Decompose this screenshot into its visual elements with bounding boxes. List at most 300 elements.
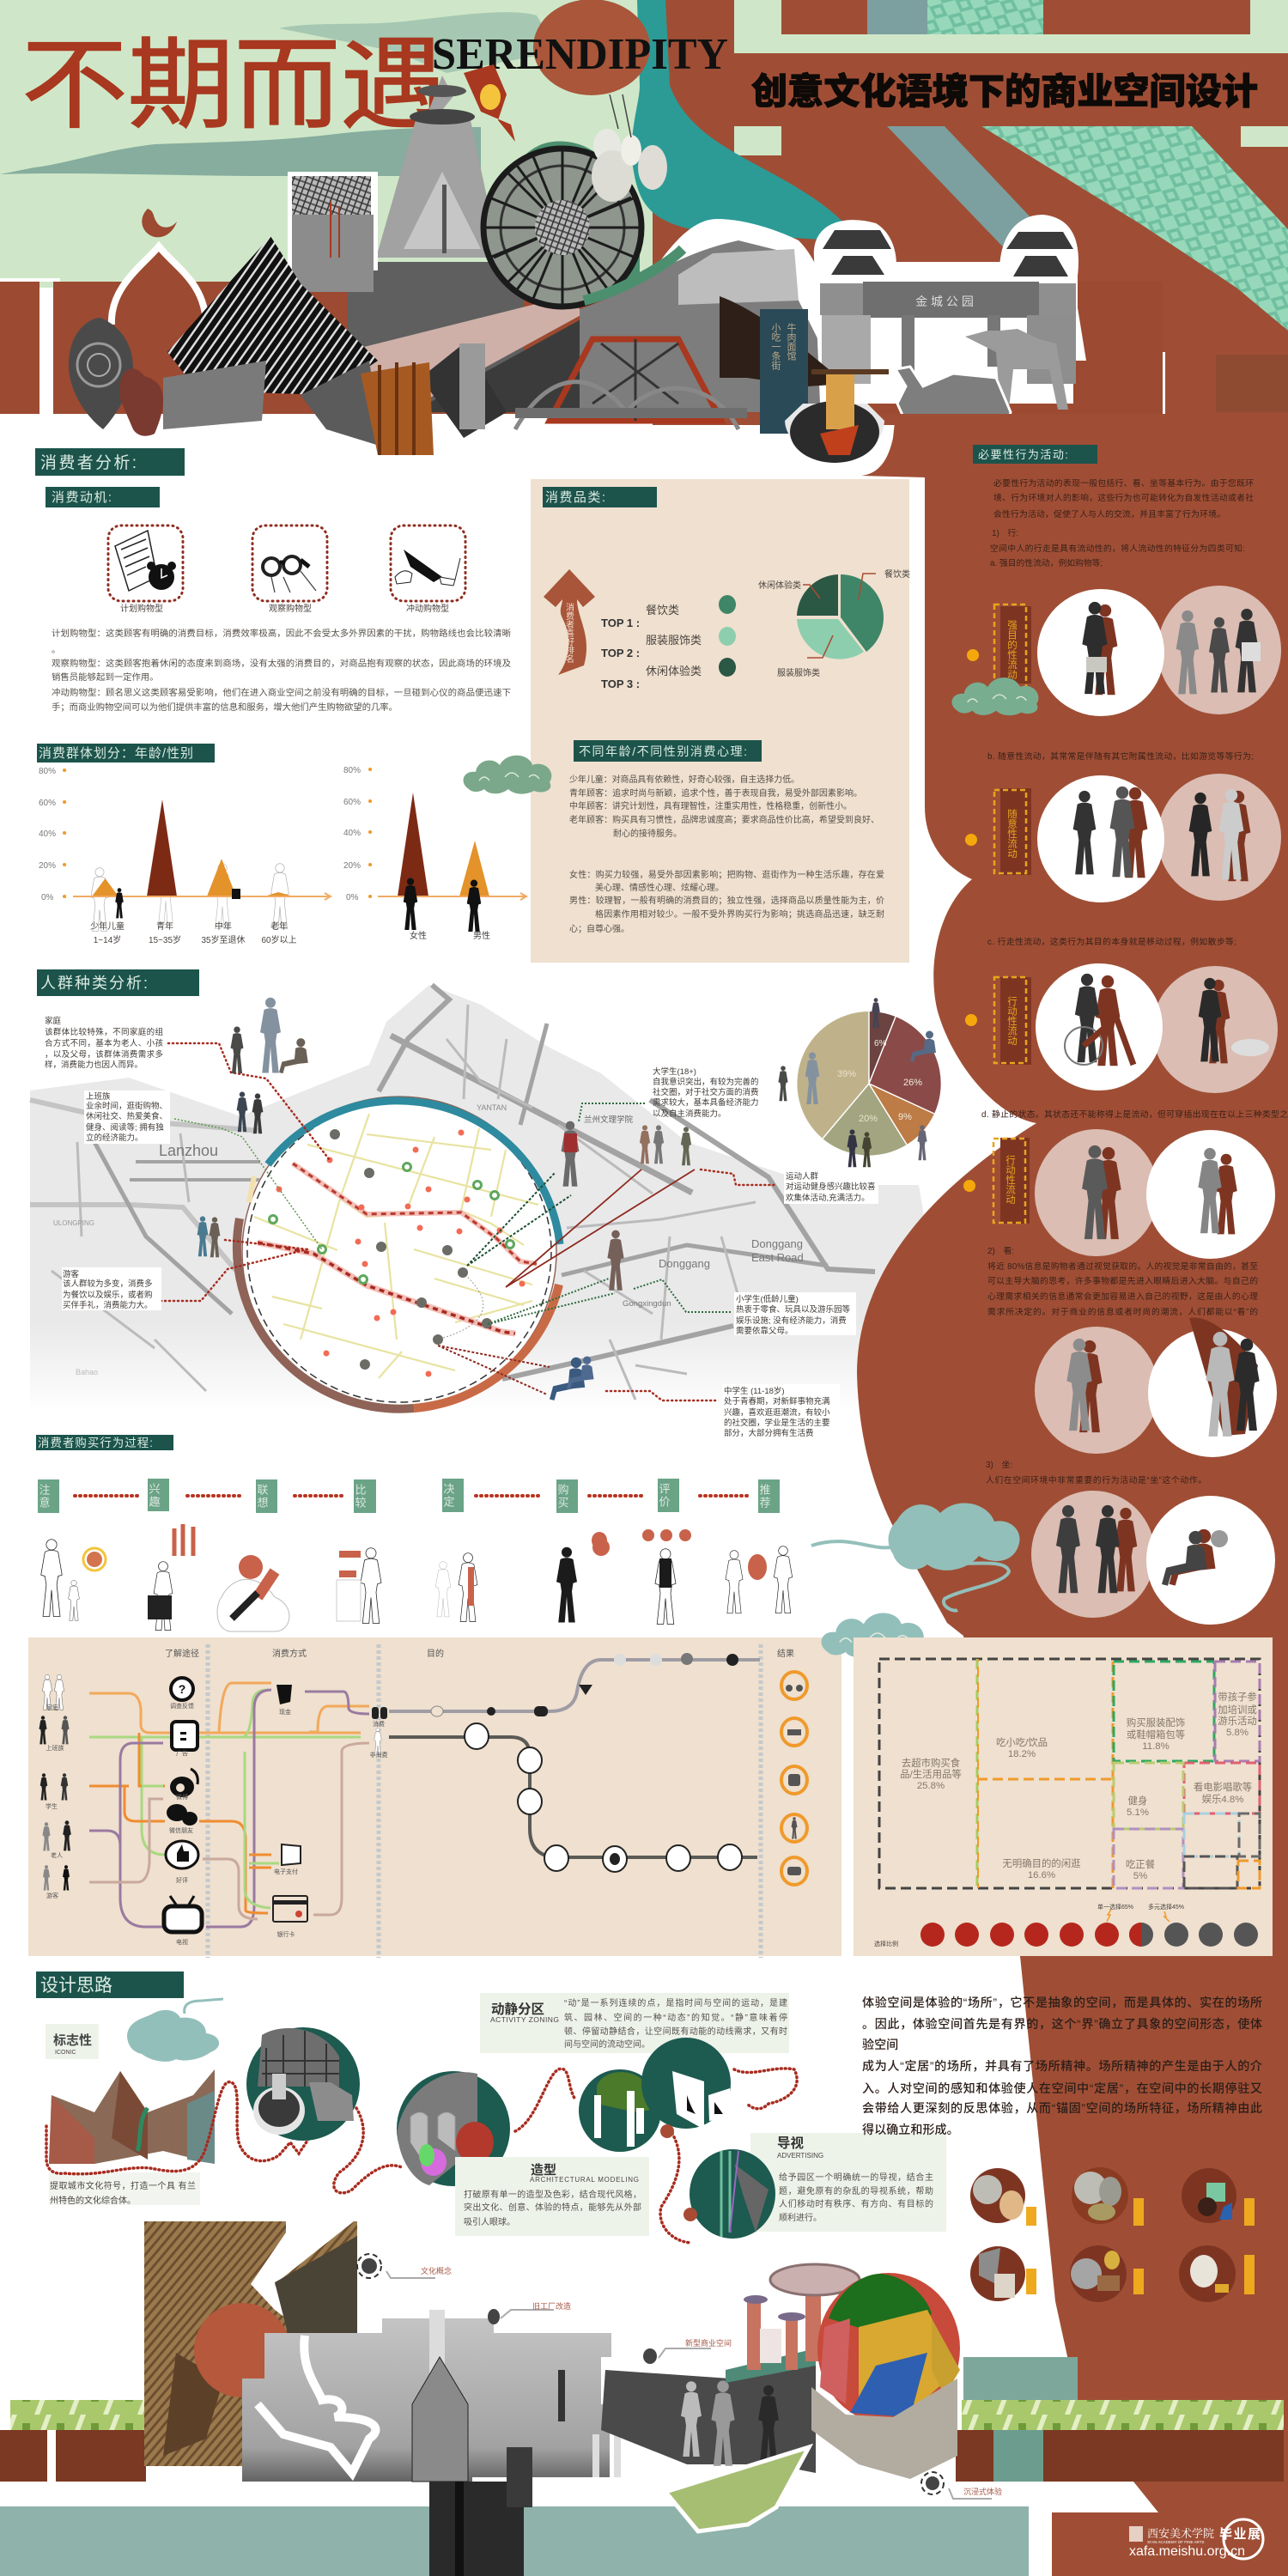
card: activity zoning: “动”是一系列连续的点，是指时间与空间的运动，是建: [564, 1997, 787, 2008]
section heading: necessary behaviour: 必要性行为活动:: [978, 448, 1068, 461]
text: sitting: [986, 1460, 1206, 1485]
bottom bands: [0, 2357, 1284, 2576]
circles: material thumbnails: [970, 2167, 1255, 2302]
chart: age split: 80%: [39, 767, 56, 776]
text: shopper types: 手；而商业购物空间可以为他们提供丰富的信息和服务，增大他们产生购物欲望的几率。: [52, 702, 398, 713]
card: iconic: ICONIC: [55, 2050, 76, 2056]
card: activity zoning: 动静分区: [491, 2002, 544, 2017]
collage: colourful sphere: [817, 2273, 960, 2424]
icon: teal cloud in design section: [127, 1999, 223, 2062]
route: red dotted path: [46, 2069, 797, 2243]
chart: category pie: [758, 568, 910, 678]
chart: gender split: 80%: [343, 766, 361, 775]
chart: age split: 1~14岁: [94, 934, 121, 945]
journey map: content: 微博: [176, 1793, 188, 1801]
callouts: collage captions: 新型商业空间: [685, 2338, 732, 2348]
treemap: labels: 加培训或: [1218, 1704, 1257, 1716]
treemap: labels: 游乐活动: [1218, 1716, 1257, 1727]
map: crowd labels: 以及自主消费能力。: [653, 1109, 726, 1119]
callouts: collage captions: 沉浸式体验: [963, 2487, 1002, 2496]
label: static state: [963, 1138, 1030, 1224]
chart: gender split: 男性: [473, 930, 490, 941]
map: city base: 兰州文理学院: [584, 1115, 634, 1125]
journey: people groups: [39, 1674, 71, 1891]
icon: teal swirling cloud: [811, 1504, 1019, 1611]
journey map: content: 微信朋友: [169, 1826, 193, 1834]
section heading: crowd types: [37, 969, 199, 996]
circle: noodle and camel: [246, 2027, 360, 2141]
text: looking: 将近 80%信息是购物者通过视觉获取的。人的视觉是非常自由的，甚至: [987, 1261, 1258, 1272]
process: step tags: 比较: [354, 1484, 366, 1508]
process: step tags: 联想: [256, 1484, 268, 1508]
chart: category pie: 休闲体验类: [758, 580, 801, 591]
collage: memorial gate: [814, 215, 1086, 404]
journey map: content: 目的: [427, 1648, 444, 1659]
row: walking flow: [965, 963, 1278, 1093]
collage: pagoda tower: [376, 76, 500, 258]
text: shopper types: 计划购物型：这类顾客有明确的消费目标，消费效率极高，因此不会受太多外界因素的干扰，购物路线也会比较清晰: [52, 628, 511, 639]
text: psychology by age and gender: 女性：购买力较强，易受外部因素影响；把购物、逛街作为一种生活乐趣，存在爱: [569, 869, 884, 880]
map: crowd labels: 自我意识突出，有较为完善的: [653, 1077, 759, 1087]
journey map: content: 电子支付: [274, 1868, 298, 1875]
map: crowd labels: 兴趣，喜欢逛逛潮流，有较小: [724, 1407, 830, 1418]
treemap: labels: 11.8%: [1142, 1741, 1170, 1752]
collage: lime ticket: [665, 2447, 809, 2531]
text: looking: 2) 看:: [987, 1245, 1014, 1256]
collage: brown accent behind pagoda: [464, 64, 515, 142]
photo: grey industrial skyline: [242, 2310, 621, 2576]
process: dotted connectors: [75, 1494, 751, 1498]
collage: dark carved panel: [720, 296, 846, 386]
collage: blue sign: 牛肉面馆: [786, 322, 797, 361]
card: advertising: [750, 2133, 946, 2232]
chart: age split: 60岁以上: [261, 934, 297, 945]
card: architectural modeling: [455, 2157, 649, 2236]
treemap: labels: 品/生活用品等: [900, 1768, 962, 1780]
chart: age split: 中年: [215, 920, 232, 932]
ranking list: 服装服饰类: [646, 634, 702, 647]
journey: channel icons: [164, 1678, 307, 1932]
journey map: content: 结果: [777, 1648, 794, 1659]
map: crowd labels: ，以及父母，该群体消费需求多: [45, 1049, 163, 1060]
chart: age split: 60%: [39, 799, 56, 808]
logo: academy mark: 毕业展: [1219, 2527, 1261, 2542]
map: crowd labels: 游客: [63, 1269, 80, 1279]
chart: crowd share pie: 26%: [903, 1078, 922, 1088]
collage: field and road: [343, 262, 592, 421]
chart: age split: 少年儿童: [90, 920, 125, 932]
text: shopper types: 销售员能够起到一定作用。: [52, 671, 159, 683]
photo: woven wooden hall: [144, 2221, 357, 2466]
chart: crowd share pie: 39%: [837, 1069, 856, 1079]
journey map: content: 了解途径: [165, 1648, 199, 1659]
text: behaviour intro: a. 强目的性流动，例如购物等;: [990, 557, 1103, 568]
section heading: age and gender: 消费群体划分：年龄/性别: [39, 746, 193, 761]
map: crowd labels: 中学生 (11-18岁): [724, 1386, 785, 1396]
collage: black lattice roof: [167, 236, 378, 395]
title: 不期而遇: 不期而遇: [21, 29, 447, 141]
circle: two people looking up: [1148, 1317, 1277, 1457]
label: purposeful flow: [967, 605, 1031, 687]
photo: market crowd: [601, 2348, 816, 2473]
text: psychology by age and gender: 老年顾客：购买具有习惯性，品牌忠诚度高；要求商品性价比高，希望受到良好、: [569, 814, 879, 825]
panel: treemap: [854, 1637, 1273, 1956]
text: psychology by age and gender: 青年顾客：追求时尚与新颖，追求个性，善于表现自我，易受外部因素影响。: [569, 787, 862, 799]
process: step tags: [38, 1479, 780, 1513]
text: psychology by age and gender: 格因素作用相对较少。一般不受外界购买行为影响；挑选商品迅速，缺乏耐: [595, 908, 884, 920]
treemap: labels: 带孩子参: [1218, 1691, 1257, 1703]
treemap: labels: 去超市购买食: [902, 1757, 961, 1769]
map: leader lines: [161, 1043, 775, 1400]
section heading: purchase process: [36, 1435, 173, 1450]
map: crowd labels: 该群体比较特殊，不同家庭的组: [45, 1027, 163, 1037]
chart: age split: 青年: [156, 920, 173, 932]
callouts: collage captions: 文化概念: [421, 2266, 452, 2275]
circle: cyclist: [1036, 963, 1278, 1093]
map: city base: Donggang: [751, 1237, 803, 1250]
collage: framed dark building: [288, 172, 378, 292]
treemap: labels: 吃小吃/饮品: [996, 1737, 1048, 1748]
collage: colourful towers: [744, 2264, 860, 2370]
collage: mountain with white halo: [580, 219, 833, 412]
text: looking: 心理需求相关的信息通常会更加容易进入自己的视野，这是由人的心理: [987, 1291, 1258, 1302]
icon: ranking arrow: 消费者喜好排名: [563, 602, 574, 664]
section heading: motivation: [46, 487, 160, 507]
text: iconic caption: [49, 2172, 200, 2206]
circle: child looking: [1035, 1327, 1158, 1454]
map: crowd labels: 运动人群: [786, 1171, 819, 1182]
collage: blue sign: [760, 309, 808, 434]
text: shopper types: [52, 628, 512, 713]
circle: dog walker: [1199, 978, 1269, 1063]
chart: age split: [39, 767, 331, 945]
chart: crowd share pie: [778, 998, 941, 1167]
map: crowd figures: [197, 998, 691, 1400]
chart: crowd share pie: 20%: [859, 1114, 878, 1124]
chart: gender split: 女性: [410, 930, 427, 941]
treemap: labels: 健身: [1128, 1795, 1147, 1807]
card: architectural modeling: 吸引人眼球。: [464, 2216, 515, 2227]
map: crowd labels: 的社交圈，学业是生活的主要: [724, 1418, 830, 1428]
icon: green cloud: [464, 756, 551, 794]
icon: ranking arrow: [544, 569, 595, 675]
map: city base: [30, 985, 927, 1413]
map: crowd labels: 休闲社交、热爱美食、: [86, 1111, 167, 1121]
section heading: psychology: [574, 740, 762, 762]
chart: choice ratio dots: 单一选择65%: [1097, 1903, 1133, 1911]
card: advertising: 给予园区一个明确统一的导视，结合主: [779, 2172, 933, 2183]
text: shopper types: 观察购物型：这类顾客抱着休闲的态度来到商场，没有太强的消费目的，对商品抱有观察的状态，因此商场的环境及: [52, 658, 512, 669]
chart: age split: 0%: [41, 893, 54, 902]
map: crowd labels: 部分，大部分拥有生活费: [724, 1428, 814, 1438]
map: crowd labels: 样，消费能力也因人而异。: [45, 1060, 143, 1070]
process: step tags: 购买: [556, 1483, 568, 1509]
process: step tags: 评价: [658, 1483, 670, 1507]
text: iconic caption: 提取城市文化符号，打造一个具 有兰: [50, 2180, 196, 2191]
label: walking flow: 行动性流动: [1006, 996, 1018, 1046]
process: step tags: 注意: [38, 1484, 50, 1508]
card: architectural modeling: 打破原有单一的造型及色彩，结合现代风格，: [464, 2189, 641, 2200]
icon: white ink squiggle: [258, 2336, 375, 2473]
card: architectural modeling: 突出文化、创意、体验的特点，能够先从外部: [464, 2202, 641, 2213]
section heading: categories: 消费品类:: [545, 490, 605, 505]
chart: age split: 35岁至退休: [201, 934, 246, 945]
section heading: design thinking: 设计思路: [40, 1976, 112, 1996]
text: shopper types: 。: [52, 646, 60, 655]
panel: consumption categories: [531, 479, 909, 963]
card: advertising: 导视: [777, 2136, 805, 2151]
journey map: content: 调查反馈: [170, 1702, 194, 1710]
treemap: labels: 购买服装配饰: [1127, 1716, 1185, 1728]
process: figures: [41, 1524, 793, 1631]
label: static state: 行动性流动: [1005, 1155, 1016, 1204]
process: step tags: 兴趣: [148, 1483, 160, 1508]
collage: blue sign: 小吃一条街: [770, 323, 781, 371]
map: crowd labels: [43, 1013, 878, 1438]
section heading: design thinking: [36, 1971, 184, 1998]
card: architectural modeling: ARCHITECTURAL MODELING: [530, 2176, 639, 2184]
label: walking flow: [965, 977, 1031, 1065]
text: psychology by age and gender: 心；自尊心强。: [569, 923, 629, 934]
callouts: collage captions: [357, 2254, 1002, 2499]
treemap: labels: 18.2%: [1008, 1749, 1036, 1759]
map: crowd labels: 大学生(18+): [653, 1066, 696, 1077]
chart: gender split: 20%: [343, 861, 361, 871]
logo: academy mark: XI'AN ACADEMY OF FINE ARTS: [1147, 2540, 1204, 2544]
card: activity zoning: 间与空间的流动空间。: [564, 2038, 650, 2050]
journey: result rings: [781, 1672, 807, 1885]
section heading: age and gender: [37, 744, 215, 762]
treemap: labels: 5.8%: [1226, 1728, 1249, 1738]
card: activity zoning: ACTIVITY ZONING: [490, 2015, 559, 2024]
subtitle: 创意文化语境下的商业空间设计: [751, 71, 1258, 112]
chart: age split: 40%: [39, 829, 56, 839]
journey: channel icons: ?: [179, 1682, 185, 1696]
icon: impulse shopping: [391, 526, 465, 614]
card: activity zoning: 顿、停留动静结合，让空间既有动能的动线需求，又有时: [564, 2026, 787, 2037]
map: city base: ULONGPING: [53, 1219, 94, 1227]
map: crowd labels: 需要依靠父母。: [736, 1326, 793, 1336]
circle: planted atrium: [579, 2069, 661, 2152]
map: crowd labels: 上班族: [86, 1091, 111, 1102]
map: crowd labels: 娱乐设施; 没有经济能力，消费: [736, 1315, 847, 1326]
text: behaviour intro: 空间中人的行走是具有流动性的，将人流动性的特征分为四类可知:: [990, 543, 1245, 554]
text: walking flow: c. 行走性流动，这类行为其目的本身就是移动过程，例如散步等;: [987, 936, 1236, 947]
map: crowd labels: 社交圈，对于社交方面的消费: [653, 1087, 759, 1097]
ranking list: 休闲体验类: [646, 665, 702, 677]
map: crowd labels: 家庭: [45, 1016, 62, 1026]
map: crowd labels: 健身、阅读等; 拥有独: [86, 1122, 164, 1133]
text: shopper types: 冲动购物型：顾名思义这类顾客易受影响，他们在进入商业空间之前没有明确的目标，一旦碰到心仪的商品便迅速下: [52, 687, 511, 698]
map: crowd labels: 欢集体活动,充满活力。: [786, 1193, 870, 1203]
collage: truss bridge: [515, 339, 747, 429]
icon: observing shopping: 观察购物型: [269, 603, 312, 614]
treemap: labels: 或鞋帽箱包等: [1127, 1728, 1185, 1741]
text: psychology by age and gender: 男性：较理智，一般有明确的消费目的；独立性强，选择商品以质量性能为主，价: [569, 895, 884, 906]
treemap: labels: 无明确目的的闲逛: [1002, 1857, 1081, 1869]
text: psychology by age and gender: 中年顾客：讲究计划性，具有理智性，注重实用性，性格稳重，创新性小。: [569, 800, 852, 811]
journey map: content: 现金: [279, 1708, 291, 1716]
map: city base: Gongxingdun: [623, 1299, 671, 1309]
text: looking: [987, 1245, 1258, 1317]
icon: planned shopping: [108, 526, 183, 614]
icon: observing shopping: [252, 526, 327, 614]
row: purposeful flow: [967, 586, 1281, 716]
text: behaviour intro: 1) 行:: [992, 527, 1018, 538]
map: city base: Bahao: [76, 1368, 98, 1376]
map: city base: Donggang: [659, 1257, 710, 1270]
chart: choice ratio dots: [874, 1903, 1258, 1947]
circle: two seated men: [1031, 1491, 1155, 1618]
text: experience space: 会带给人更深刻的反思体验，从而“锚固”空间的场所特征，场所精神由此: [862, 2101, 1262, 2115]
logo: academy mark: 西安美术学院: [1147, 2527, 1214, 2540]
collage: water wheel: [483, 141, 641, 307]
row: static state: [963, 1129, 1275, 1259]
ranking list: TOP 2 :: [601, 647, 640, 659]
map: crowd labels: 买伴手礼，消费能力大。: [63, 1300, 153, 1310]
text: static state: d. 静止的状态。其状态还不能称得上是流动，但可穿插出现在在以上三种类型之: [981, 1109, 1288, 1120]
chart: category pie: 餐饮类: [884, 568, 910, 580]
journey map: content: 广告: [176, 1749, 188, 1757]
text: experience space: 体验空间是体验的“场所”，它不是抽象的空间，而是具体的、实在的场所: [862, 1996, 1262, 2009]
text: experience space: 入。人对空间的感知和体验使人在空间中“定居”，在空间中的长期停驻又: [862, 2081, 1262, 2095]
section heading: motivation: 消费动机:: [52, 490, 112, 505]
panel: journey map: [28, 1637, 841, 1956]
collage: concrete base: [811, 2379, 957, 2479]
text: looking: 可以主导大脑的思考，许多事物都是先进入眼睛后进入大脑。与自己的: [987, 1275, 1258, 1286]
ranking list: TOP 1 :: [601, 617, 640, 629]
journey map: content: 上班族: [46, 1744, 64, 1752]
header brown block row: [0, 262, 1288, 414]
text: casual flow: b. 随意性流动，其常常是伴随有其它附属性流动，比如游览等等行为;: [987, 750, 1254, 762]
process: step tags: 推荐: [757, 1484, 771, 1508]
journey lines: [89, 1660, 760, 1927]
map: city base: YANTAN: [477, 1103, 507, 1112]
chart: crowd share pie: 6%: [874, 1039, 887, 1048]
chart: age split: 老年: [270, 920, 288, 932]
title: SERENDIPITY: SERENDIPITY: [432, 30, 728, 79]
collage: pottery vases: [69, 318, 163, 436]
map: crowd labels: 需求较大，基本具备经济能力: [653, 1097, 759, 1108]
chart: activity treemap: [879, 1659, 1260, 1888]
journey: consumption modes: 非消费: [369, 1751, 388, 1759]
section heading: crowd types: 人群种类分析:: [40, 975, 148, 992]
map: focus circle: [237, 1096, 560, 1409]
chart: crowd share pie: 9%: [898, 1112, 912, 1122]
text: sitting: 3) 坐:: [986, 1460, 1012, 1470]
treemap: labels: 吃正餐: [1126, 1858, 1156, 1870]
map: city base: Lanzhou: [159, 1142, 218, 1159]
circle: elderly couple: [1037, 774, 1281, 902]
section heading: psychology: 不同年龄/不同性别消费心理:: [579, 744, 747, 758]
dots: route endpoints: [660, 2124, 697, 2221]
map: crowd labels: 合方式不同，基本为老人、小孩: [45, 1038, 163, 1048]
circle: walker: [1037, 586, 1281, 716]
collage: noodle bowl: [785, 369, 889, 463]
map: crowd labels: 为餐饮以及娱乐，或者购: [63, 1290, 153, 1300]
journey map: content: 好评: [176, 1876, 188, 1884]
card: activity zoning: 筑、园林、空间的一种“动态”的知觉。“静”意味着停: [564, 2012, 787, 2023]
ranking list: 餐饮类: [646, 604, 679, 617]
icon: mosque dome and crescent: [53, 209, 216, 414]
map: crowd labels: 小学生(低龄儿童): [736, 1294, 799, 1304]
map: crowd labels: 该人群较为多变，消费多: [63, 1279, 153, 1289]
section heading: purchase process: 消费者购买行为过程:: [38, 1437, 153, 1449]
text: psychology by age and gender: 少年儿童：对商品具有依赖性，好奇心较强，自主选择力低。: [569, 774, 799, 785]
section heading: consumer analysis: 消费者分析:: [40, 453, 137, 472]
card: advertising: 人们移动时有秩序、有方向、有目标的: [779, 2198, 933, 2209]
chart: choice ratio dots: 多元选择45%: [1148, 1903, 1184, 1911]
process: step tags: 决定: [441, 1483, 455, 1508]
collage: rubble and wooden roofs: [163, 343, 507, 447]
journey map: content: 游客: [46, 1892, 58, 1899]
callouts: collage captions: 旧工厂改造: [532, 2301, 571, 2311]
label: casual flow: [965, 788, 1031, 875]
text: psychology by age and gender: 耐心的接待服务。: [613, 828, 682, 839]
circle: white display boxes: [641, 2038, 732, 2129]
journey map: content: 家庭: [46, 1704, 58, 1711]
text: iconic caption: 州特色的文化综合体。: [50, 2195, 136, 2206]
circle: young pair: [1189, 789, 1250, 881]
icon: cloud near first row: [952, 677, 1038, 715]
large brown background shape: [857, 414, 1288, 2576]
map: city base: East Road: [751, 1251, 804, 1264]
journey map: content: 银行卡: [276, 1930, 295, 1938]
row: sitting: [1031, 1491, 1275, 1625]
journey map: content: 学生: [46, 1802, 58, 1810]
section heading: consumer analysis: [35, 448, 185, 476]
section heading: categories: [543, 487, 657, 507]
text: psychology by age and gender: 美心理、情感性心理、炫耀心理。: [595, 882, 724, 893]
circle: architecture and flowers: [397, 2071, 510, 2186]
photo: street scene: [49, 2069, 215, 2164]
text: looking: 需求所决定的。对于商业的信息或者时尚的潮流，人们都能以“看”的: [987, 1306, 1258, 1317]
chart: gender split: 40%: [343, 829, 361, 838]
card: iconic: 标志性: [53, 2032, 92, 2048]
collage: camels: [896, 329, 1068, 432]
text: sitting: 人们在空间环境中非常重要的行为活动是“坐”这个动作。: [986, 1474, 1206, 1485]
chart: gender split: [343, 766, 526, 941]
text: psychology by age and gender: [569, 774, 884, 934]
circle: brown disc: [194, 2303, 290, 2397]
label: purposeful flow: 强目的性流动: [1006, 620, 1018, 679]
logo: academy mark: [1129, 2519, 1263, 2559]
card: activity zoning: [480, 1993, 789, 2053]
journey map: content: 电视: [176, 1938, 188, 1946]
treemap: labels: 16.6%: [1028, 1870, 1055, 1880]
map: crowd labels: 对运动健身感兴趣比较喜: [786, 1182, 876, 1192]
treemap: labels: 看电影唱歌等: [1194, 1781, 1252, 1793]
chart: gender split: 0%: [346, 893, 359, 902]
journey map: content: 老人: [51, 1851, 63, 1859]
icon: teal cloud beside journey panel: [822, 1613, 924, 1658]
label: casual flow: 随意性流动: [1006, 808, 1018, 859]
card: iconic: [46, 2024, 99, 2059]
treemap: labels: 娱乐4.8%: [1202, 1793, 1243, 1805]
text: behaviour intro: 会性行为活动，促使了人与人的交流，并且丰富了行为环境。: [993, 508, 1225, 519]
journey map: content: 消费方式: [272, 1648, 307, 1659]
card: architectural modeling: 造型: [531, 2163, 556, 2178]
chart: gender split: 60%: [343, 798, 361, 807]
circle: guidance system: [690, 2149, 775, 2239]
map: crowd labels: 业余时间，逛街购物、: [86, 1101, 167, 1111]
journey: route nodes: [465, 1723, 742, 1872]
treemap: labels: 25.8%: [917, 1781, 945, 1791]
treemap: labels: 5%: [1133, 1871, 1147, 1881]
journey map: content: [39, 1644, 807, 1958]
row: looking: [1035, 1317, 1277, 1457]
icon: yellow sun: [480, 84, 501, 110]
